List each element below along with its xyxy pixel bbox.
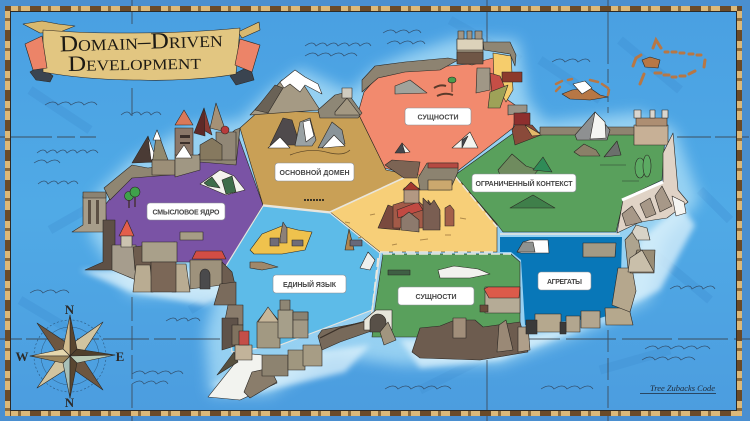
label: osnovnoy domen: ОСНОВНОЙ ДОМЕН: [280, 168, 350, 177]
compass letter N top: N: [65, 302, 75, 317]
castle: purple north citadel: [104, 103, 240, 200]
banner top curls: [23, 21, 260, 38]
towers in agregaty and coast: [517, 225, 655, 312]
label: agregaty: [538, 272, 591, 290]
region: green ogranichennyy kontekst: [455, 132, 665, 232]
region: yellow strip: [493, 53, 513, 102]
castle: yellow central: [345, 182, 466, 245]
east cliff: [617, 133, 688, 233]
label: sushchnosti bottom: СУЩНОСТИ: [416, 294, 456, 301]
label: agregaty: АГРЕГАТЫ: [547, 279, 582, 286]
trees and rocks: purple: [124, 170, 245, 208]
castle: west tower: [72, 192, 106, 232]
banner scroll: [43, 28, 240, 80]
region: dark blue agregaty: [500, 237, 622, 325]
title banner: [23, 21, 260, 85]
sea wave lines: [30, 30, 715, 389]
region: purple smyslovoe yadro: [105, 130, 263, 265]
region dividers: [263, 175, 620, 320]
region: yellow sand: [330, 175, 497, 252]
label: smyslovoe yadro: СМЫСЛОВОЕ ЯДРО: [152, 209, 220, 216]
scroll left end: [25, 36, 47, 70]
title heading line 1: Domain–Driven: [59, 26, 224, 56]
mountains: osnovnoy domen ridge: [250, 70, 362, 200]
compass letter W: W: [16, 349, 28, 364]
label: edinyy yazyk: ЕДИНЫЙ ЯЗЫК: [283, 280, 337, 289]
label: sushchnosti top: [405, 108, 471, 125]
northeast islets: [556, 40, 705, 100]
title heading line 2: Development: [68, 49, 201, 76]
region: green bottom sushchnosti: [372, 254, 520, 337]
label: sushchnosti top: СУЩНОСТИ: [418, 114, 458, 121]
label: smyslovoe yadro: [147, 203, 225, 220]
region: tan osnovnoy domen: [240, 111, 410, 212]
north gate and wall: sushchnosti: [362, 31, 542, 190]
scroll right end: [235, 39, 260, 72]
label: edinyy yazyk: [273, 275, 346, 293]
lighthouse and snowy cliff: [208, 331, 322, 400]
bridge: [318, 310, 396, 350]
label: ogranichennyy kontekst: [472, 174, 576, 192]
castle: purple south fortress: [85, 220, 235, 292]
region: salmon sushchnosti: [358, 57, 518, 178]
shallow water foam around the island: [80, 38, 700, 395]
label: ogranichennyy kontekst: ОГРАНИЧЕННЫЙ КОНТЕКСТ: [476, 179, 573, 188]
compass rose: [30, 302, 115, 398]
compass letter E: E: [116, 349, 124, 364]
label: osnovnoy domen: [275, 163, 354, 181]
bottom green house and rocks: [388, 266, 520, 313]
label: sushchnosti bottom: [398, 287, 474, 305]
banner bottom curls: [30, 66, 254, 85]
signature: Tree Zubacks Code: [650, 383, 715, 393]
compass letter N bottom: N: [65, 395, 75, 410]
island: yellow village in language sea: [250, 222, 375, 270]
towers: edinyy yazyk: [257, 300, 308, 348]
walls and rocky coast: south: [412, 308, 633, 360]
rocky pillars: west coast: [214, 282, 243, 350]
green top hills and castle: [498, 110, 668, 208]
region: light blue edinyy yazyk: [226, 206, 380, 352]
